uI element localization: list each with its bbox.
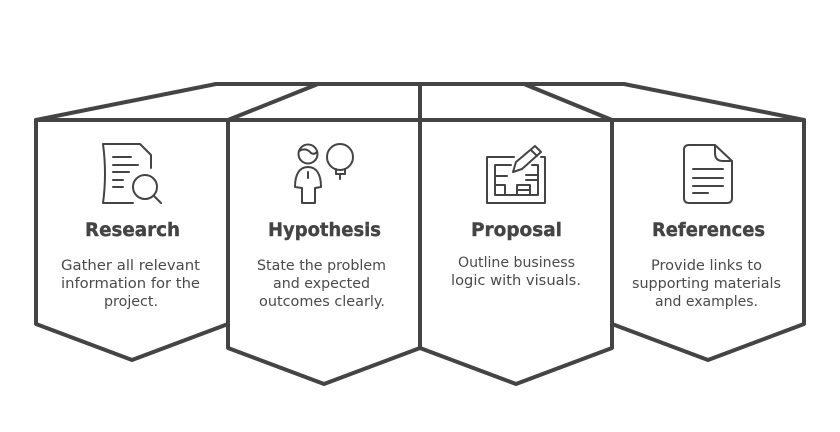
proposal pennant shape xyxy=(420,120,612,384)
references description: supporting materials xyxy=(632,276,781,292)
proposal description: logic with visuals. xyxy=(451,273,581,289)
references description xyxy=(632,258,781,310)
panel: proposal xyxy=(420,120,612,384)
research heading: Research xyxy=(85,219,180,241)
proposal description: Outline business xyxy=(458,255,575,271)
icon: blueprint with pencil xyxy=(487,146,545,203)
hypothesis pennant shape xyxy=(228,120,420,384)
hypothesis description: and expected xyxy=(273,276,370,292)
references description: Provide links to xyxy=(651,258,762,274)
proposal description xyxy=(451,255,581,289)
research pennant shape xyxy=(36,120,228,360)
research description: project. xyxy=(104,294,158,310)
panel: hypothesis xyxy=(228,120,420,384)
hypothesis description: State the problem xyxy=(257,258,386,274)
references pennant shape xyxy=(612,120,804,360)
hypothesis description xyxy=(257,258,386,310)
panel: references xyxy=(612,120,804,360)
references description: and examples. xyxy=(655,294,758,310)
icon: document with magnifying glass xyxy=(103,144,161,203)
research description: Gather all relevant xyxy=(61,258,200,274)
panel: research xyxy=(36,120,228,360)
hypothesis description: outcomes clearly. xyxy=(259,294,385,310)
roof: top folded edges xyxy=(36,84,804,120)
references heading: References xyxy=(652,219,765,241)
hypothesis heading: Hypothesis xyxy=(268,219,381,241)
research description: information for the xyxy=(61,276,200,292)
icon: document page xyxy=(684,145,732,203)
research description xyxy=(61,258,200,310)
icon: person with light bulb xyxy=(295,144,353,203)
proposal heading: Proposal xyxy=(471,219,562,241)
